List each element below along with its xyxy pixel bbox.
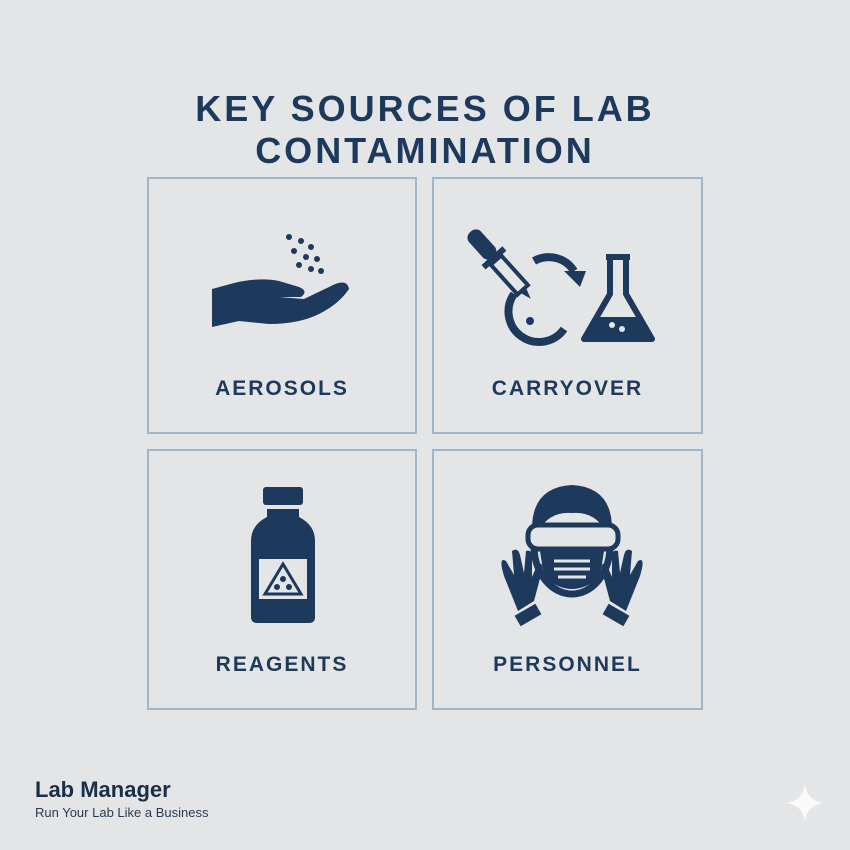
title <box>195 88 655 171</box>
title: CONTAMINATION <box>255 130 595 171</box>
logo: Lab Manager: Lab Manager <box>35 777 171 802</box>
icon: dropper, arrows and flask <box>468 229 655 346</box>
panel: carryover <box>432 177 703 434</box>
icon: bottle <box>251 487 315 623</box>
logo: Lab Manager <box>35 777 208 820</box>
label: PERSONNEL <box>493 653 642 676</box>
logo: Lab Manager: Run Your Lab Like a Business <box>35 805 208 820</box>
icon: person with goggles, mask and gloves <box>501 485 643 626</box>
panel: personnel <box>432 449 703 710</box>
icon: hand with particles <box>212 234 349 327</box>
label: REAGENTS <box>216 653 348 676</box>
label: AEROSOLS <box>215 377 349 400</box>
panel: reagents <box>147 449 417 710</box>
title: KEY SOURCES OF LAB <box>195 88 655 129</box>
icon: sparkle <box>787 785 823 821</box>
panel: aerosols <box>147 177 417 434</box>
label: CARRYOVER <box>492 377 643 400</box>
